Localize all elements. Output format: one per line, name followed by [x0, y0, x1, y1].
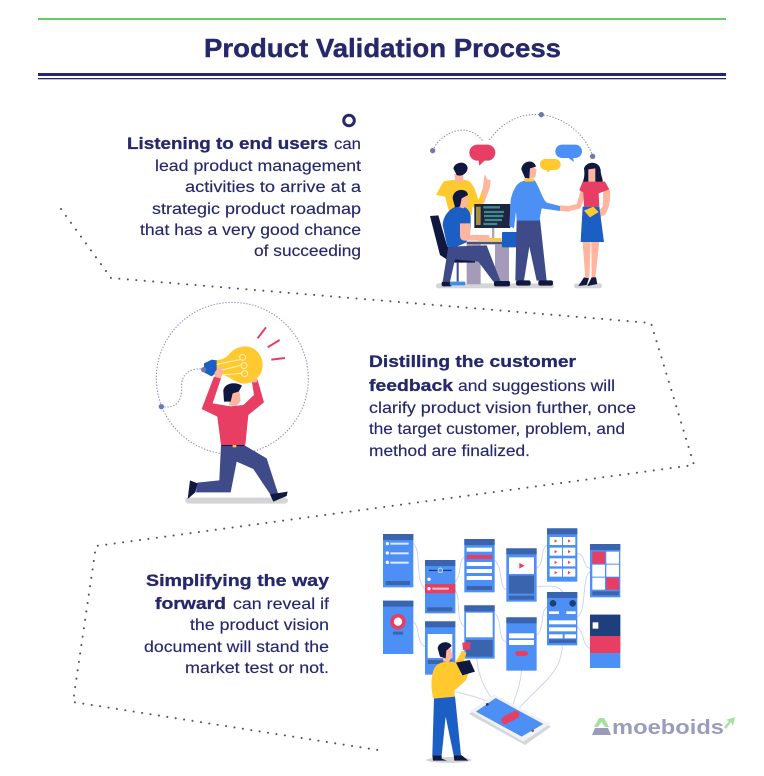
torso and arms — [202, 377, 264, 445]
illustration: app wireframes and phone — [383, 528, 620, 763]
text block: distilling feedback: method are finalized. — [369, 443, 530, 460]
text block: listening to end users: can — [334, 136, 361, 153]
wireframe screen 8 — [506, 617, 537, 671]
text block: simplifying the way forward: document will stand the — [144, 639, 329, 656]
logo: Amoeboids: moeboids — [612, 717, 724, 739]
text block: listening to end users: lead product management — [155, 158, 362, 175]
person with tablet — [426, 642, 475, 763]
text block: distilling feedback: the target customer, problem, and — [369, 421, 625, 438]
text block: listening to end users: that has a very good chance — [140, 222, 361, 239]
text block: listening to end users: of succeeding — [254, 243, 361, 260]
speech bubbles — [469, 145, 582, 172]
briefcase — [502, 232, 518, 247]
wireframe screen 7 — [506, 548, 537, 602]
shadows — [436, 283, 554, 288]
person: seated developer — [430, 190, 510, 286]
text block: simplifying the way forward: the product vision — [190, 617, 329, 634]
dotted path connector — [61, 209, 694, 751]
wireframe screen 9 — [547, 528, 577, 582]
wireframe screen 11 — [590, 544, 620, 597]
head — [223, 383, 242, 406]
wireframe screen 1 — [383, 534, 413, 587]
person: man in blue — [509, 161, 570, 286]
wireframe screen 5 — [464, 539, 495, 592]
text block: listening to end users: activities to arrive at a — [185, 179, 361, 196]
icon: start ring — [344, 115, 354, 126]
text block: distilling feedback: clarify product vision further, once — [369, 400, 636, 417]
text block: distilling feedback: feedback — [369, 376, 454, 395]
title: Product Validation Process — [204, 33, 561, 63]
speech arcs — [430, 112, 595, 159]
phone — [469, 694, 551, 745]
person: yellow shirt — [436, 163, 491, 215]
rays — [258, 327, 285, 360]
text block: simplifying the way forward: market test or not. — [185, 660, 329, 677]
shadow — [185, 498, 288, 504]
illustration: man lifting light bulb — [156, 302, 308, 504]
text block: distilling feedback — [369, 352, 636, 460]
legs — [188, 444, 288, 502]
text block: distilling feedback: Distilling the customer — [369, 352, 576, 371]
dotted circle — [156, 302, 308, 454]
wireframe screen 6 — [464, 605, 495, 659]
wireframe screen 10 — [547, 592, 577, 645]
wireframe screen 4 — [425, 621, 455, 675]
text block: listening to end users: Listening to end users — [127, 134, 328, 153]
connector lines — [413, 543, 590, 717]
text block: simplifying the way forward — [144, 571, 330, 677]
wireframe screen 2 — [383, 601, 413, 654]
text block: simplifying the way forward: forward — [155, 594, 226, 613]
person: woman in red and blue — [566, 163, 610, 286]
light bulb — [201, 346, 263, 384]
text block: listening to end users — [127, 134, 362, 260]
text block: simplifying the way forward: Simplifying the way — [146, 571, 330, 590]
wireframe screen 3 — [425, 560, 455, 613]
wireframe screen 12 — [590, 615, 620, 668]
hands — [215, 366, 257, 382]
logo: Amoeboids — [592, 717, 735, 739]
text block: listening to end users: strategic product roadmap — [152, 201, 361, 218]
desk and monitor — [467, 204, 512, 284]
dotted cord — [159, 369, 203, 409]
illustration: team meeting — [430, 112, 610, 288]
text block: distilling feedback: and suggestions will — [458, 378, 615, 395]
text block: simplifying the way forward: can reveal if — [233, 596, 330, 613]
